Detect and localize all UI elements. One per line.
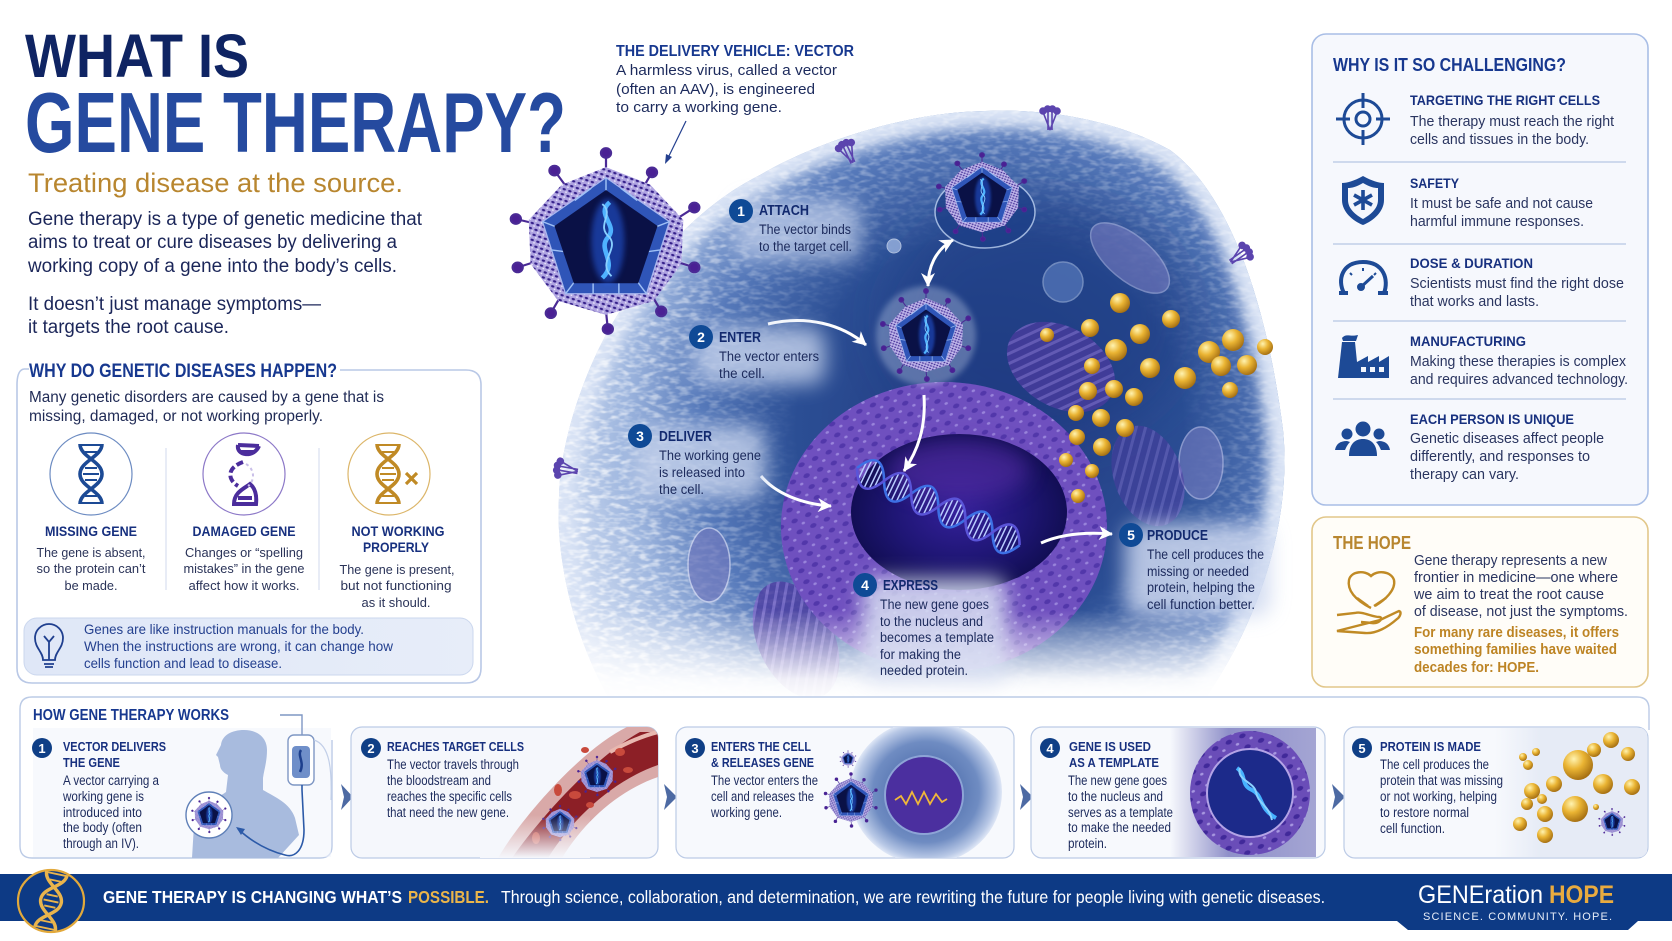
challenge: manufacturing: MANUFACTURING	[1410, 333, 1526, 349]
step card 3: ENTERS THE CELL	[711, 739, 811, 754]
callout: instruction manuals: cells function and lead to disease.	[84, 655, 282, 671]
step 3 deliver	[628, 424, 765, 498]
arrow: deliver	[761, 476, 831, 506]
delivery vehicle callout: (often an AAV), is engineered	[616, 81, 815, 98]
step card 3: The vector enters the	[711, 773, 818, 788]
step card 1	[32, 715, 331, 858]
delivery vehicle callout	[616, 43, 854, 116]
arrow: attach to enter	[928, 240, 953, 286]
step card 5: The cell produces the	[1380, 757, 1489, 772]
intro text: aims to treat or cure diseases by delivering a	[28, 232, 397, 253]
panel: why is it so challenging	[1312, 34, 1648, 505]
damaged gene text: DAMAGED GENE	[192, 523, 296, 539]
step card 2: that need the new gene.	[387, 805, 509, 820]
arrow 3 to 4	[1020, 784, 1033, 810]
step 1 attach	[729, 199, 860, 260]
challenge: safety: It must be safe and not cause	[1410, 196, 1593, 212]
step card 2: REACHES TARGET CELLS	[387, 739, 524, 754]
vector illustration: large virus	[511, 148, 699, 334]
challenge: targeting	[1410, 92, 1614, 148]
icon: target	[1336, 93, 1390, 145]
nucleus DNA	[851, 454, 1026, 559]
panel: the hope: frontier in medicine—one where	[1414, 570, 1618, 586]
step 3 deliver: The working gene	[659, 448, 761, 463]
illustration: blood vessel	[480, 727, 658, 858]
damaged gene text: Changes or “spelling	[185, 545, 303, 560]
step 4 express: becomes a template	[880, 630, 994, 645]
step 1 attach: to the target cell.	[759, 239, 852, 254]
step card 5: 5	[1358, 741, 1366, 756]
callout: instruction manuals: Genes are like instruction manuals for the body.	[84, 621, 364, 637]
icon: gauge	[1339, 262, 1388, 293]
title: WHAT IS	[25, 22, 249, 90]
logo: GENEration	[1418, 881, 1543, 909]
panel: the hope	[1312, 517, 1648, 687]
step card 2: The vector travels through	[387, 757, 519, 772]
heading: THE HOPE	[1333, 533, 1411, 553]
logo	[1418, 881, 1614, 923]
panel: the hope: something families have waited	[1414, 642, 1617, 658]
step 5 produce: 5	[1127, 527, 1135, 543]
icon: damaged gene	[203, 433, 285, 515]
callout: instruction manuals	[24, 618, 473, 675]
footer message: GENE THERAPY IS CHANGING WHAT’S	[103, 887, 402, 907]
step 3 deliver: is released into	[659, 465, 745, 480]
step card 4: GENE IS USED	[1069, 739, 1151, 754]
title: GENE THERAPY?	[25, 76, 566, 171]
panel intro: missing, damaged, or not working properly.	[29, 408, 323, 425]
panel intro: Many genetic disorders are caused by a gene that is	[29, 389, 384, 406]
step 3 deliver: 3	[636, 428, 644, 444]
challenge: dose	[1410, 255, 1624, 310]
intro text: Gene therapy is a type of genetic medicine that	[28, 209, 423, 230]
step 2 enter: 2	[697, 329, 705, 345]
step card 5: cell function.	[1380, 821, 1445, 836]
logo: HOPE	[1549, 881, 1614, 909]
challenge: each person: Genetic diseases affect people	[1410, 431, 1604, 447]
step 4 express: for making the	[880, 647, 961, 662]
challenge: manufacturing: and requires advanced technology.	[1410, 372, 1628, 388]
step card 5	[1344, 727, 1648, 858]
icon: people	[1335, 422, 1390, 456]
intro text: it targets the root cause.	[28, 317, 229, 338]
not working text: but not functioning	[340, 578, 452, 593]
panel: how gene therapy works	[20, 697, 1649, 864]
panel intro	[29, 389, 384, 425]
step card 4: to make the needed	[1068, 820, 1171, 835]
step card 1: introduced into	[63, 805, 142, 820]
step 4 express: 4	[861, 577, 869, 593]
delivery vehicle callout: THE DELIVERY VEHICLE: VECTOR	[616, 43, 854, 60]
heading: HOW GENE THERAPY WORKS	[33, 707, 229, 724]
step card 1: working gene is	[62, 789, 144, 804]
title	[25, 22, 566, 171]
step card 1: VECTOR DELIVERS	[63, 739, 166, 754]
step card 5: to restore normal	[1380, 805, 1469, 820]
challenge: safety	[1410, 175, 1593, 230]
challenge: safety: harmful immune responses.	[1410, 214, 1584, 230]
challenge: targeting: cells and tissues in the body.	[1410, 132, 1589, 148]
footer message: POSSIBLE.	[408, 887, 489, 907]
intro text: It doesn’t just manage symptoms—	[28, 294, 321, 315]
step card 4: protein.	[1068, 836, 1107, 851]
challenge: targeting: TARGETING THE RIGHT CELLS	[1410, 92, 1600, 108]
challenge: manufacturing	[1410, 333, 1628, 388]
step card 2: reaches the specific cells	[387, 789, 512, 804]
challenge: each person: EACH PERSON IS UNIQUE	[1410, 411, 1574, 427]
heading: WHY DO GENETIC DISEASES HAPPEN?	[29, 361, 337, 382]
step card 4: 4	[1046, 741, 1054, 756]
step 2 enter: ENTER	[719, 330, 761, 346]
step card 2: 2	[367, 741, 375, 756]
step 5 produce: The cell produces the	[1147, 547, 1264, 562]
icon: missing gene	[50, 433, 132, 515]
step card 5: protein that was missing	[1380, 773, 1503, 788]
step card 4: serves as a template	[1068, 805, 1173, 820]
missing gene text: MISSING GENE	[45, 523, 137, 539]
challenge: each person: differently, and responses to	[1410, 449, 1590, 465]
footer banner	[0, 870, 1672, 932]
step card 5: or not working, helping	[1380, 789, 1497, 804]
step 5 produce: protein, helping the	[1147, 580, 1255, 595]
step card 4	[1031, 727, 1325, 858]
missing gene text: so the protein can’t	[36, 561, 146, 576]
arrow: enter	[768, 321, 866, 345]
illustration: vector at cell	[824, 720, 1002, 864]
step card 2: the bloodstream and	[387, 773, 491, 788]
step card 5: PROTEIN IS MADE	[1380, 739, 1481, 754]
central illustration: target cell	[540, 106, 1300, 712]
step card 3	[676, 720, 1014, 864]
step 5 produce: missing or needed	[1147, 564, 1249, 579]
step card 1: THE GENE	[63, 755, 120, 770]
logo: SCIENCE. COMMUNITY. HOPE.	[1423, 911, 1612, 923]
step 1 attach: 1	[737, 203, 745, 219]
step card 1: the body (often	[63, 820, 142, 835]
illustration: nucleus with gene	[1170, 728, 1316, 857]
icon: heart in hand	[1337, 572, 1400, 633]
arrow 4 to 5	[1332, 784, 1345, 810]
not working text: NOT WORKING	[352, 523, 445, 539]
challenge: dose: Scientists must find the right dose	[1410, 276, 1624, 292]
challenge: each person: therapy can vary.	[1410, 467, 1519, 483]
challenge: dose: DOSE & DURATION	[1410, 255, 1533, 271]
challenge: safety: SAFETY	[1410, 175, 1460, 191]
step card 2	[351, 727, 658, 858]
delivery vehicle callout: to carry a working gene.	[616, 99, 782, 116]
arrow 1 to 2	[341, 784, 353, 810]
arrow to vector	[665, 121, 686, 164]
not working text: The gene is present,	[340, 562, 454, 577]
footer message	[103, 887, 1325, 907]
nucleus	[781, 382, 1107, 672]
protein spheres	[1040, 293, 1273, 503]
icon: light bulb	[35, 624, 63, 667]
delivery vehicle callout: A harmless virus, called a vector	[616, 62, 837, 79]
step 4 express: needed protein.	[880, 663, 968, 678]
step 2 enter: The vector enters	[719, 349, 819, 364]
step card 4: to the nucleus and	[1068, 789, 1163, 804]
challenge: manufacturing: Making these therapies is complex	[1410, 354, 1627, 370]
vector entering cell	[935, 153, 1035, 248]
panel: the hope: we aim to treat the root cause	[1413, 587, 1604, 603]
step 2 enter: the cell.	[719, 366, 765, 381]
step 3 deliver: DELIVER	[659, 429, 712, 445]
icon: factory	[1338, 335, 1389, 378]
step 4 express: to the nucleus and	[880, 614, 983, 629]
panel: the hope: of disease, not just the symptoms.	[1414, 604, 1628, 620]
icon: not working gene	[348, 433, 430, 515]
step card 3: working gene.	[710, 805, 782, 820]
tagline: Treating disease at the source.	[28, 168, 403, 198]
step card 1: 1	[38, 741, 46, 756]
missing gene text: be made.	[64, 578, 118, 593]
arrow: produce	[1041, 533, 1112, 543]
challenge: dose: that works and lasts.	[1410, 294, 1539, 310]
panel: why do genetic diseases happen	[17, 361, 481, 683]
step card 3: cell and releases the	[711, 789, 814, 804]
step 1 attach: The vector binds	[759, 222, 851, 237]
challenge: targeting: The therapy must reach the right	[1410, 114, 1614, 130]
arrow 2 to 3	[664, 784, 677, 810]
step 2 enter	[689, 325, 825, 384]
step card 3: 3	[691, 741, 699, 756]
step card 3: & RELEASES GENE	[711, 755, 814, 770]
not working text: PROPERLY	[363, 539, 430, 555]
damaged gene text: affect how it works.	[188, 578, 300, 593]
damaged gene text: mistakes” in the gene	[184, 561, 304, 576]
step 5 produce: PRODUCE	[1147, 528, 1208, 544]
receptors on membrane	[552, 106, 1256, 481]
vector inside cell	[876, 286, 976, 386]
illustration: patient and IV	[186, 715, 331, 858]
illustration: proteins	[1513, 728, 1647, 857]
arrow: into nucleus	[904, 395, 924, 471]
step 3 deliver: the cell.	[659, 482, 704, 497]
step 5 produce: cell function better.	[1147, 597, 1255, 612]
intro text	[27, 209, 423, 338]
icon: shield	[1342, 176, 1384, 225]
organelles	[688, 210, 1223, 712]
missing gene text: The gene is absent,	[36, 545, 146, 560]
heading: WHY IS IT SO CHALLENGING?	[1333, 55, 1566, 75]
step card 1: A vector carrying a	[63, 773, 159, 788]
not working text: as it should.	[362, 595, 430, 610]
step 1 attach: ATTACH	[759, 203, 809, 219]
footer message: Through science, collaboration, and determination, we are rewriting the future for people living with genetic diseases.	[501, 887, 1325, 907]
missing gene text	[36, 523, 146, 593]
panel: the hope: Gene therapy represents a new	[1414, 553, 1607, 569]
step card 4: AS A TEMPLATE	[1069, 755, 1159, 770]
panel: the hope: For many rare diseases, it offers	[1414, 625, 1619, 641]
callout: instruction manuals: When the instructions are wrong, it can change how	[84, 638, 394, 654]
step 4 express: The new gene goes	[880, 597, 989, 612]
intro text: working copy of a gene into the body’s cells.	[27, 256, 397, 277]
step 4 express	[853, 573, 1007, 682]
panel: the hope: decades for: HOPE.	[1414, 660, 1539, 676]
step card 4: The new gene goes	[1068, 773, 1167, 788]
damaged gene text	[184, 523, 304, 593]
step 4 express: EXPRESS	[883, 578, 938, 594]
icon: DNA badge	[18, 870, 84, 932]
challenge: each person	[1410, 411, 1604, 483]
step 5 produce	[1119, 523, 1270, 616]
step card 1: through an IV).	[63, 836, 139, 851]
not working text	[340, 523, 454, 610]
